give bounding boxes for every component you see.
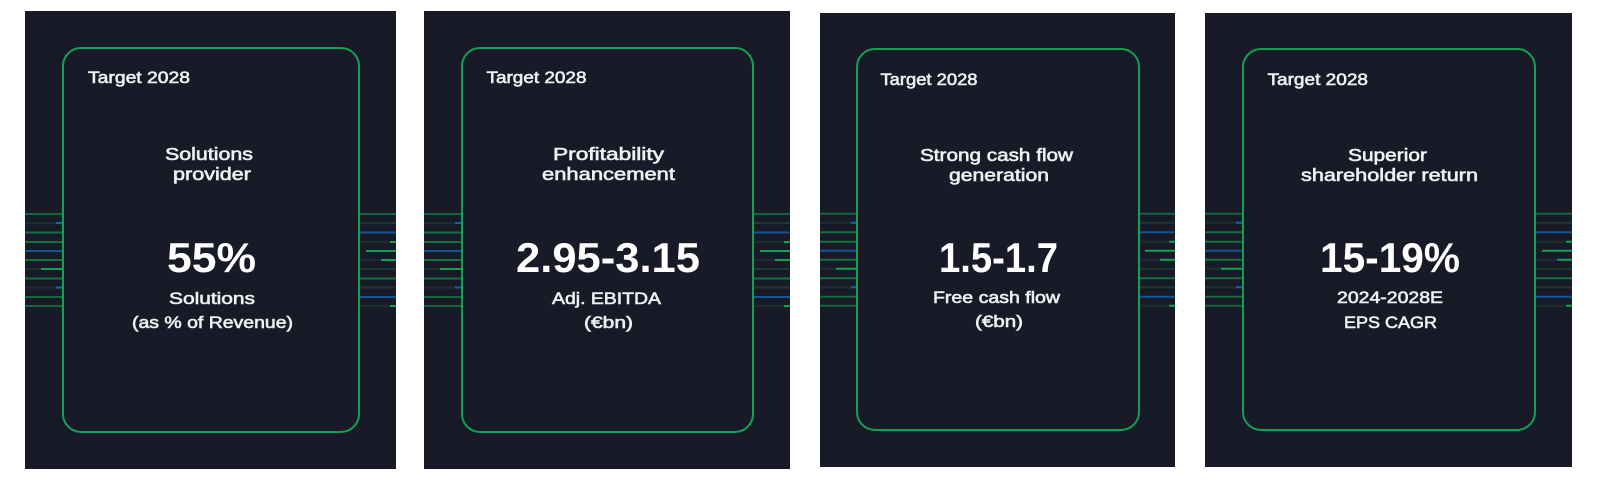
metric: 15-19%: 15-19% xyxy=(1320,234,1460,281)
metric: 2.95-3.15: 2.95-3.15 xyxy=(516,234,700,281)
metric: 55%: 55% xyxy=(167,234,256,281)
heading: strong cash flow generation: generation xyxy=(949,165,1049,185)
heading: profitability enhancement: enhancement xyxy=(542,164,675,184)
card outline xyxy=(857,49,1139,430)
left streak lines xyxy=(25,214,62,306)
heading: solutions provider: provider xyxy=(173,164,251,184)
caption: solutions as percent of revenue: Solutions xyxy=(169,289,255,308)
card outline xyxy=(462,48,753,432)
left streak lines xyxy=(1205,214,1242,306)
heading: superior shareholder return: Superior xyxy=(1348,145,1427,165)
caption: free cash flow in euro billions xyxy=(933,288,1061,331)
label: target 2028: Target 2028 xyxy=(486,69,586,87)
right streak lines xyxy=(358,214,396,306)
panel: superior shareholder return xyxy=(1205,13,1572,467)
caption: 2024-2028E EPS CAGR: EPS CAGR xyxy=(1344,313,1437,332)
caption: free cash flow in euro billions: (€bn) xyxy=(975,312,1023,331)
heading: solutions provider xyxy=(165,144,253,184)
left streak lines xyxy=(820,214,857,306)
right streak lines xyxy=(752,214,790,306)
card outline xyxy=(1243,49,1535,430)
caption: 2024-2028E EPS CAGR xyxy=(1337,288,1443,332)
caption: adj. ebitda in euro billions: Adj. EBITDA xyxy=(552,289,662,308)
card outline xyxy=(63,48,359,432)
right streak lines xyxy=(1137,214,1175,306)
metric: 1.5-1.7: 1.5-1.7 xyxy=(939,234,1058,281)
heading: solutions provider: Solutions xyxy=(165,144,253,164)
heading: strong cash flow generation: Strong cash flow xyxy=(920,145,1073,165)
heading: superior shareholder return: shareholder return xyxy=(1301,165,1478,185)
caption: 2024-2028E EPS CAGR: 2024-2028E xyxy=(1337,288,1443,307)
panel: solutions provider xyxy=(25,11,396,469)
caption: solutions as percent of revenue xyxy=(132,289,293,332)
panel: strong cash flow generation xyxy=(820,13,1175,467)
heading: strong cash flow generation xyxy=(920,145,1073,185)
label: target 2028: Target 2028 xyxy=(1268,71,1368,89)
caption: solutions as percent of revenue: (as % of Revenue) xyxy=(132,313,293,332)
heading: profitability enhancement xyxy=(542,144,675,184)
heading: superior shareholder return xyxy=(1301,145,1478,185)
label: target 2028: Target 2028 xyxy=(880,71,978,89)
caption: free cash flow in euro billions: Free cash flow xyxy=(933,288,1061,307)
left streak lines xyxy=(424,214,461,306)
right streak lines xyxy=(1534,214,1572,306)
caption: adj. ebitda in euro billions: (€bn) xyxy=(584,313,633,332)
caption: adj. ebitda in euro billions xyxy=(552,289,662,332)
heading: profitability enhancement: Profitability xyxy=(553,144,664,164)
panel: profitability enhancement xyxy=(424,11,790,469)
label: target 2028: Target 2028 xyxy=(88,69,190,87)
